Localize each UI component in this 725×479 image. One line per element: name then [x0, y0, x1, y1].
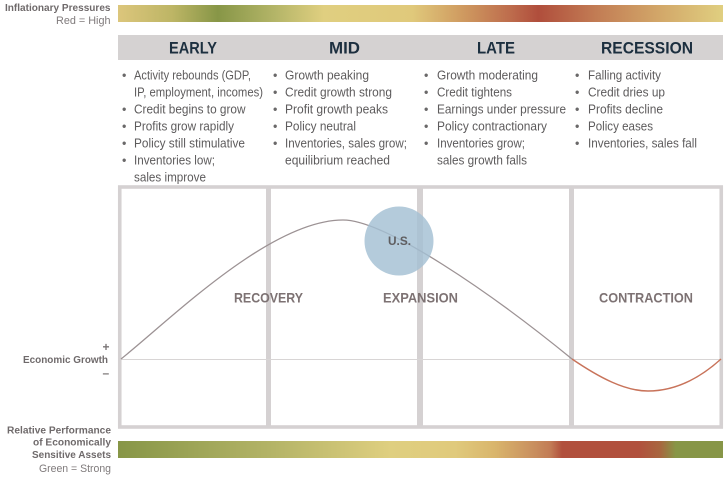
- text block: early phase characteristics: Profits grow rapidly: [134, 120, 235, 134]
- text block: late phase characteristics: •: [424, 136, 428, 150]
- text block: early phase characteristics: Policy still stimulative: [134, 136, 245, 150]
- marker: U.S. position: U.S.: [388, 234, 411, 248]
- text block: mid phase characteristics: Growth peaking: [285, 68, 369, 82]
- text block: mid phase characteristics: •: [273, 68, 277, 82]
- text block: late phase characteristics: Inventories grow;: [437, 136, 525, 150]
- text block: recession phase characteristics: Profits decline: [588, 102, 663, 116]
- text block: late phase characteristics: Policy contractionary: [437, 120, 548, 134]
- text block: early phase characteristics: •: [122, 68, 126, 82]
- phase header band: EARLY: [169, 38, 218, 58]
- relative performance label: Sensitive Assets: [32, 449, 111, 461]
- text block: late phase characteristics: •: [424, 86, 428, 100]
- text block: late phase characteristics: Growth moderating: [437, 68, 538, 82]
- relative performance gradient bar: [118, 441, 723, 458]
- text block: early phase characteristics: [122, 68, 263, 184]
- text block: mid phase characteristics: •: [273, 136, 277, 150]
- text block: early phase characteristics: •: [122, 136, 126, 150]
- economic growth axis label: –: [102, 366, 110, 380]
- text block: early phase characteristics: IP, employment, incomes): [134, 86, 263, 100]
- zero growth axis line: [121, 358, 720, 360]
- inflationary pressures label: Inflationary Pressures: [5, 2, 111, 14]
- growth curve: contraction: [572, 359, 721, 391]
- inflationary pressures label: [5, 2, 111, 27]
- text block: recession phase characteristics: •: [575, 86, 579, 100]
- relative performance label: [7, 424, 111, 475]
- text block: recession phase characteristics: Inventories, sales fall: [588, 136, 697, 150]
- phase header band: [118, 35, 723, 60]
- phase header band: MID: [329, 38, 360, 58]
- text block: late phase characteristics: Credit tightens: [437, 86, 512, 100]
- relative performance label: Green = Strong: [39, 463, 111, 475]
- text block: late phase characteristics: [424, 68, 566, 168]
- text block: late phase characteristics: •: [424, 120, 428, 134]
- marker: U.S. position: [364, 206, 434, 276]
- economic growth axis label: [23, 340, 110, 380]
- relative performance label: of Economically: [33, 436, 111, 448]
- economic growth axis label: Economic Growth: [23, 354, 108, 366]
- text block: mid phase characteristics: Policy neutral: [285, 120, 356, 134]
- text block: recession phase characteristics: Falling activity: [588, 68, 662, 82]
- text block: early phase characteristics: Inventories low;: [134, 154, 215, 168]
- text block: mid phase characteristics: Profit growth peaks: [285, 102, 388, 116]
- text block: mid phase characteristics: equilibrium reached: [285, 154, 390, 168]
- text block: recession phase characteristics: •: [575, 120, 579, 134]
- text block: recession phase characteristics: Policy eases: [588, 120, 653, 134]
- phase header band: RECESSION: [601, 38, 693, 58]
- phase label: contraction: CONTRACTION: [599, 290, 693, 306]
- text block: early phase characteristics: Activity rebounds (GDP,: [134, 68, 251, 82]
- text block: recession phase characteristics: [575, 68, 697, 150]
- text block: mid phase characteristics: •: [273, 120, 277, 134]
- text block: recession phase characteristics: Credit dries up: [588, 86, 665, 100]
- text block: late phase characteristics: sales growth falls: [437, 154, 527, 168]
- text block: early phase characteristics: Credit begins to grow: [134, 102, 246, 116]
- inflationary pressures gradient bar: [118, 5, 723, 22]
- chart: economic growth cycle: [120, 187, 721, 427]
- phase label: expansion: EXPANSION: [383, 290, 458, 306]
- text block: mid phase characteristics: Inventories, sales grow;: [285, 136, 407, 150]
- text block: early phase characteristics: •: [122, 154, 126, 168]
- text block: mid phase characteristics: [273, 68, 407, 168]
- text block: recession phase characteristics: •: [575, 136, 579, 150]
- text block: late phase characteristics: •: [424, 102, 428, 116]
- text block: mid phase characteristics: •: [273, 86, 277, 100]
- text block: mid phase characteristics: Credit growth strong: [285, 86, 392, 100]
- phase header band: LATE: [477, 38, 515, 58]
- text block: late phase characteristics: Earnings under pressure: [437, 102, 566, 116]
- phase label: recovery: RECOVERY: [234, 290, 304, 306]
- text block: recession phase characteristics: •: [575, 102, 579, 116]
- inflationary pressures label: Red = High: [56, 15, 110, 27]
- chart frame and phase dividers: [120, 187, 721, 427]
- text block: late phase characteristics: •: [424, 68, 428, 82]
- economic growth axis label: +: [102, 340, 110, 354]
- growth curve: above trend: [121, 220, 572, 359]
- text block: early phase characteristics: •: [122, 120, 126, 134]
- text block: early phase characteristics: sales improve: [134, 170, 206, 184]
- text block: mid phase characteristics: •: [273, 102, 277, 116]
- text block: early phase characteristics: •: [122, 102, 126, 116]
- text block: recession phase characteristics: •: [575, 68, 579, 82]
- relative performance label: Relative Performance: [7, 424, 111, 436]
